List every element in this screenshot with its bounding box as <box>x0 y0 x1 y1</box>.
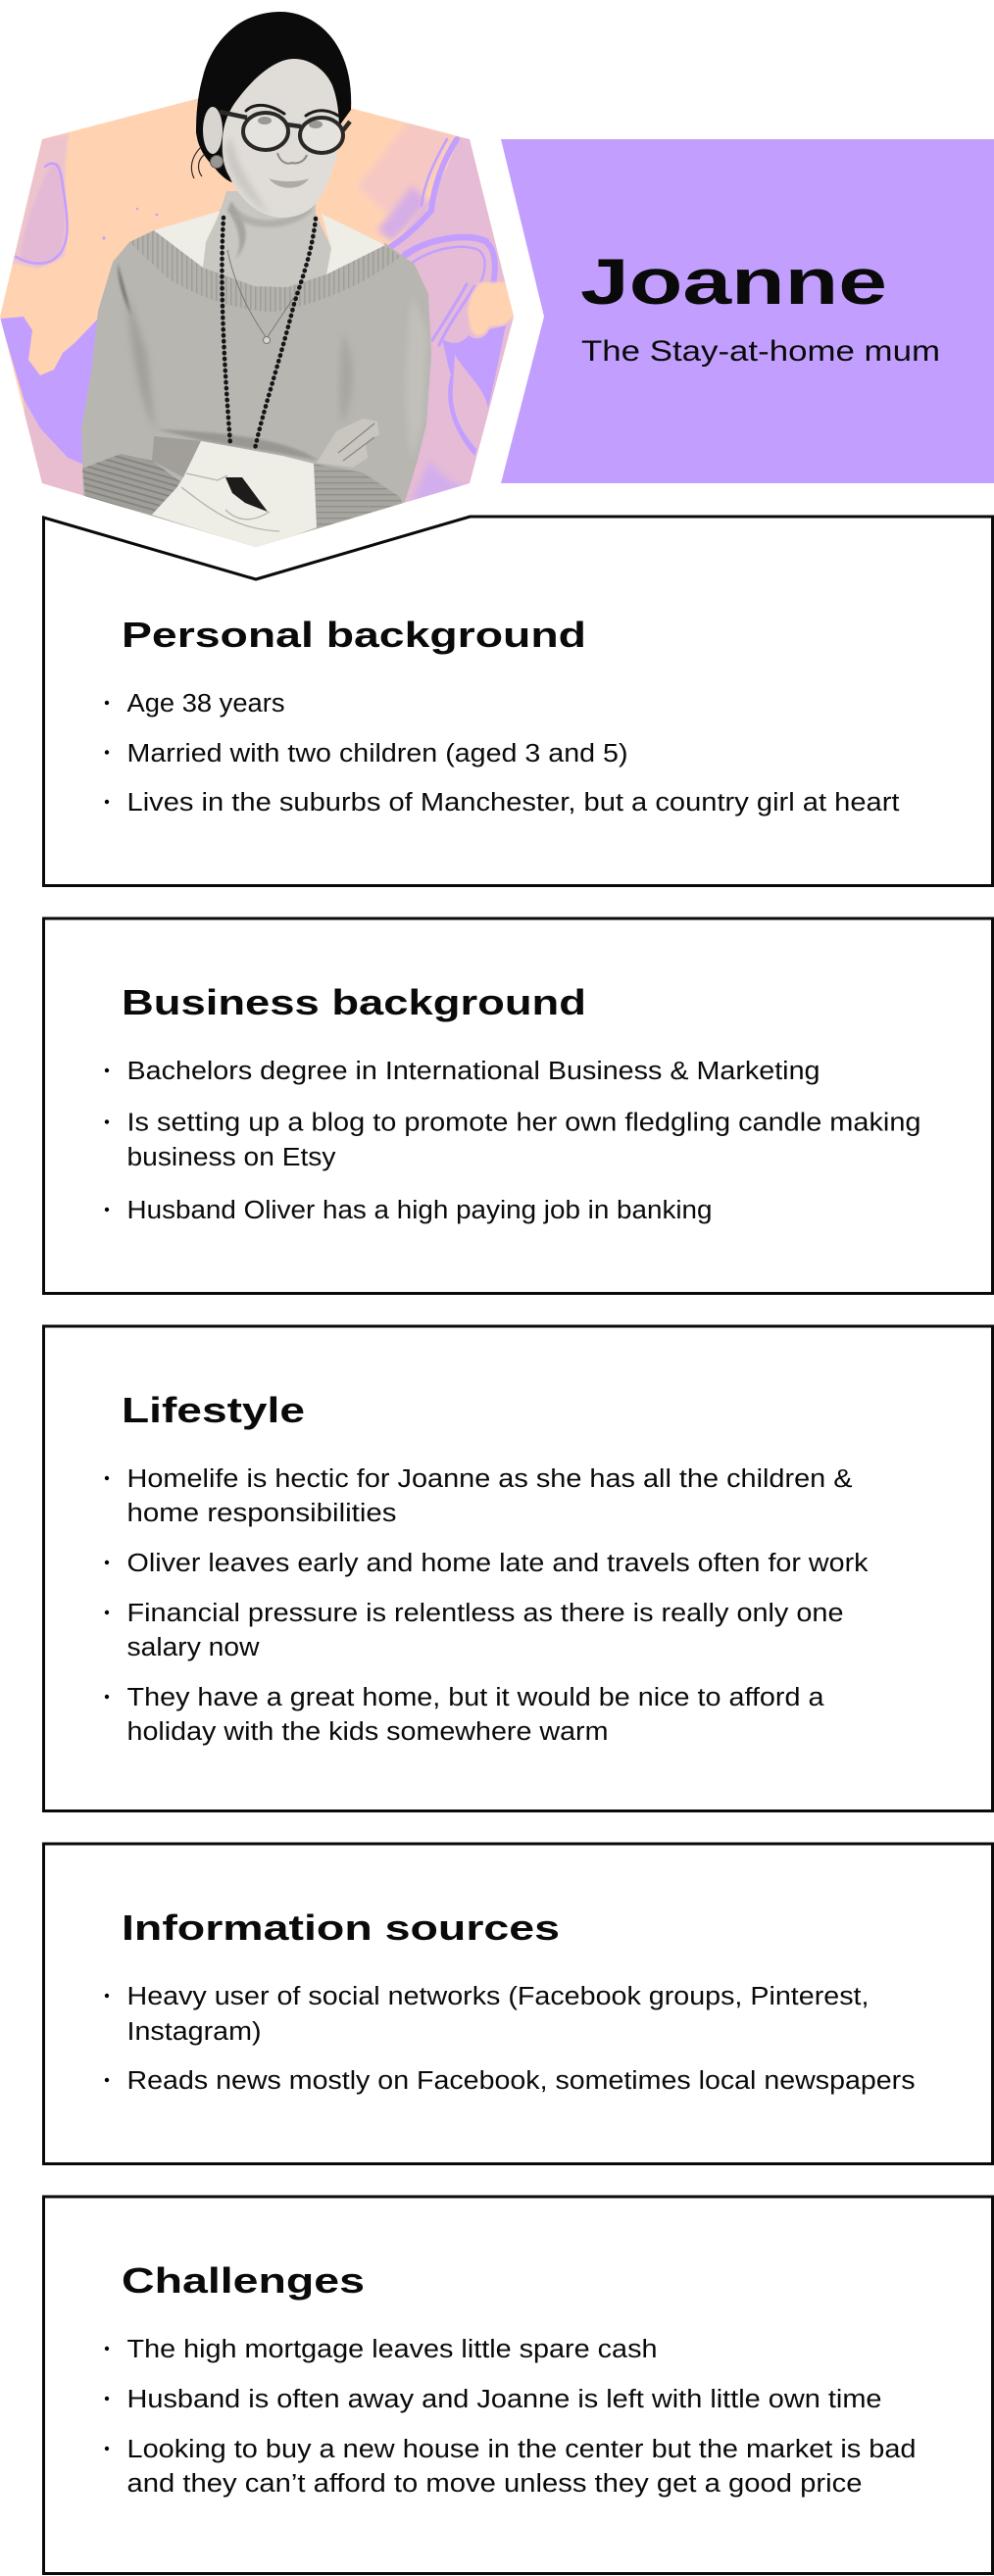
pink marble patch top left <box>10 133 70 269</box>
loose hair wisps <box>191 147 204 178</box>
marbled octagon background <box>0 78 520 549</box>
list: Homelife is hectic for Joanne as she has all the children & <box>127 1465 853 1493</box>
heading: Lifestyle <box>122 1390 305 1430</box>
name banner <box>501 139 994 483</box>
list: Looking to buy a new house in the center but the market is bad <box>127 2436 916 2463</box>
right hand fingers <box>317 419 379 468</box>
list: Financial pressure is relentless as there is really only one <box>127 1600 844 1627</box>
portrait with marbled octagon background <box>0 12 520 551</box>
list <box>105 1465 869 1746</box>
hand gap <box>225 477 268 512</box>
peach drip right <box>468 282 515 335</box>
panel: challenges <box>43 2197 992 2574</box>
list: Heavy user of social networks (Facebook groups, Pinterest, <box>127 1983 869 2010</box>
panel: business background <box>43 918 992 1294</box>
glasses <box>220 112 350 153</box>
beaded necklaces <box>222 218 316 449</box>
heading: Business background <box>122 982 586 1022</box>
left forearm <box>152 436 201 477</box>
list: Husband is often away and Joanne is left with little own time <box>127 2386 882 2413</box>
panel: information sources <box>43 1844 992 2164</box>
eyebrows <box>246 105 338 116</box>
list: Married with two children (aged 3 and 5) <box>127 740 627 768</box>
purple stream right <box>441 325 506 456</box>
sweater shading <box>118 263 131 316</box>
face <box>223 59 339 218</box>
clothing, clipped at octagon base <box>81 191 431 551</box>
white shirt collar left <box>154 211 221 268</box>
list <box>105 1058 920 1224</box>
sweater <box>81 230 431 549</box>
neck and chest skin <box>203 191 331 287</box>
earring <box>210 155 224 169</box>
heading: Information sources <box>122 1907 560 1948</box>
list: Lives in the suburbs of Manchester, but a country girl at heart <box>127 789 899 817</box>
list: salary now <box>127 1634 260 1661</box>
list <box>105 690 899 817</box>
list: Is setting up a blog to promote her own fledgling candle making <box>127 1110 920 1137</box>
purple veins <box>387 139 457 249</box>
ear <box>203 107 223 154</box>
list: home responsibilities <box>127 1500 396 1527</box>
list: Bachelors degree in International Business & Marketing <box>127 1058 820 1085</box>
heading: Challenges <box>122 2260 365 2301</box>
nose <box>277 153 307 164</box>
name: Joanne <box>580 245 887 318</box>
list: holiday with the kids somewhere warm <box>127 1718 608 1746</box>
panel: personal background <box>43 517 992 886</box>
white shirt collar right <box>322 214 385 274</box>
purple pool lower left <box>0 317 97 465</box>
list: Instagram) <box>127 2018 261 2046</box>
list: Age 38 years <box>127 690 284 718</box>
list: business on Etsy <box>127 1144 336 1171</box>
eyes <box>258 117 323 128</box>
list <box>105 1983 916 2095</box>
neck rib collar <box>129 230 400 312</box>
list: Reads news mostly on Facebook, sometimes local newspapers <box>127 2067 916 2095</box>
list: Husband Oliver has a high paying job in banking <box>127 1197 712 1224</box>
mouth <box>269 178 309 188</box>
white shirt cuffs and hand <box>152 441 317 551</box>
head <box>191 12 351 218</box>
list: and they can’t afford to move unless they get a good price <box>127 2470 863 2498</box>
list: Oliver leaves early and home late and travels often for work <box>127 1550 869 1577</box>
left cuff <box>82 454 181 515</box>
list: They have a great home, but it would be nice to afford a <box>127 1684 824 1711</box>
hair <box>196 12 351 182</box>
pink marble right <box>393 137 514 504</box>
list <box>105 2336 917 2498</box>
heading: Personal background <box>122 615 586 655</box>
list: The high mortgage leaves little spare cash <box>127 2336 657 2363</box>
right cuff <box>314 464 403 529</box>
panel: lifestyle <box>43 1326 992 1811</box>
role: The Stay-at-home mum <box>581 335 940 368</box>
